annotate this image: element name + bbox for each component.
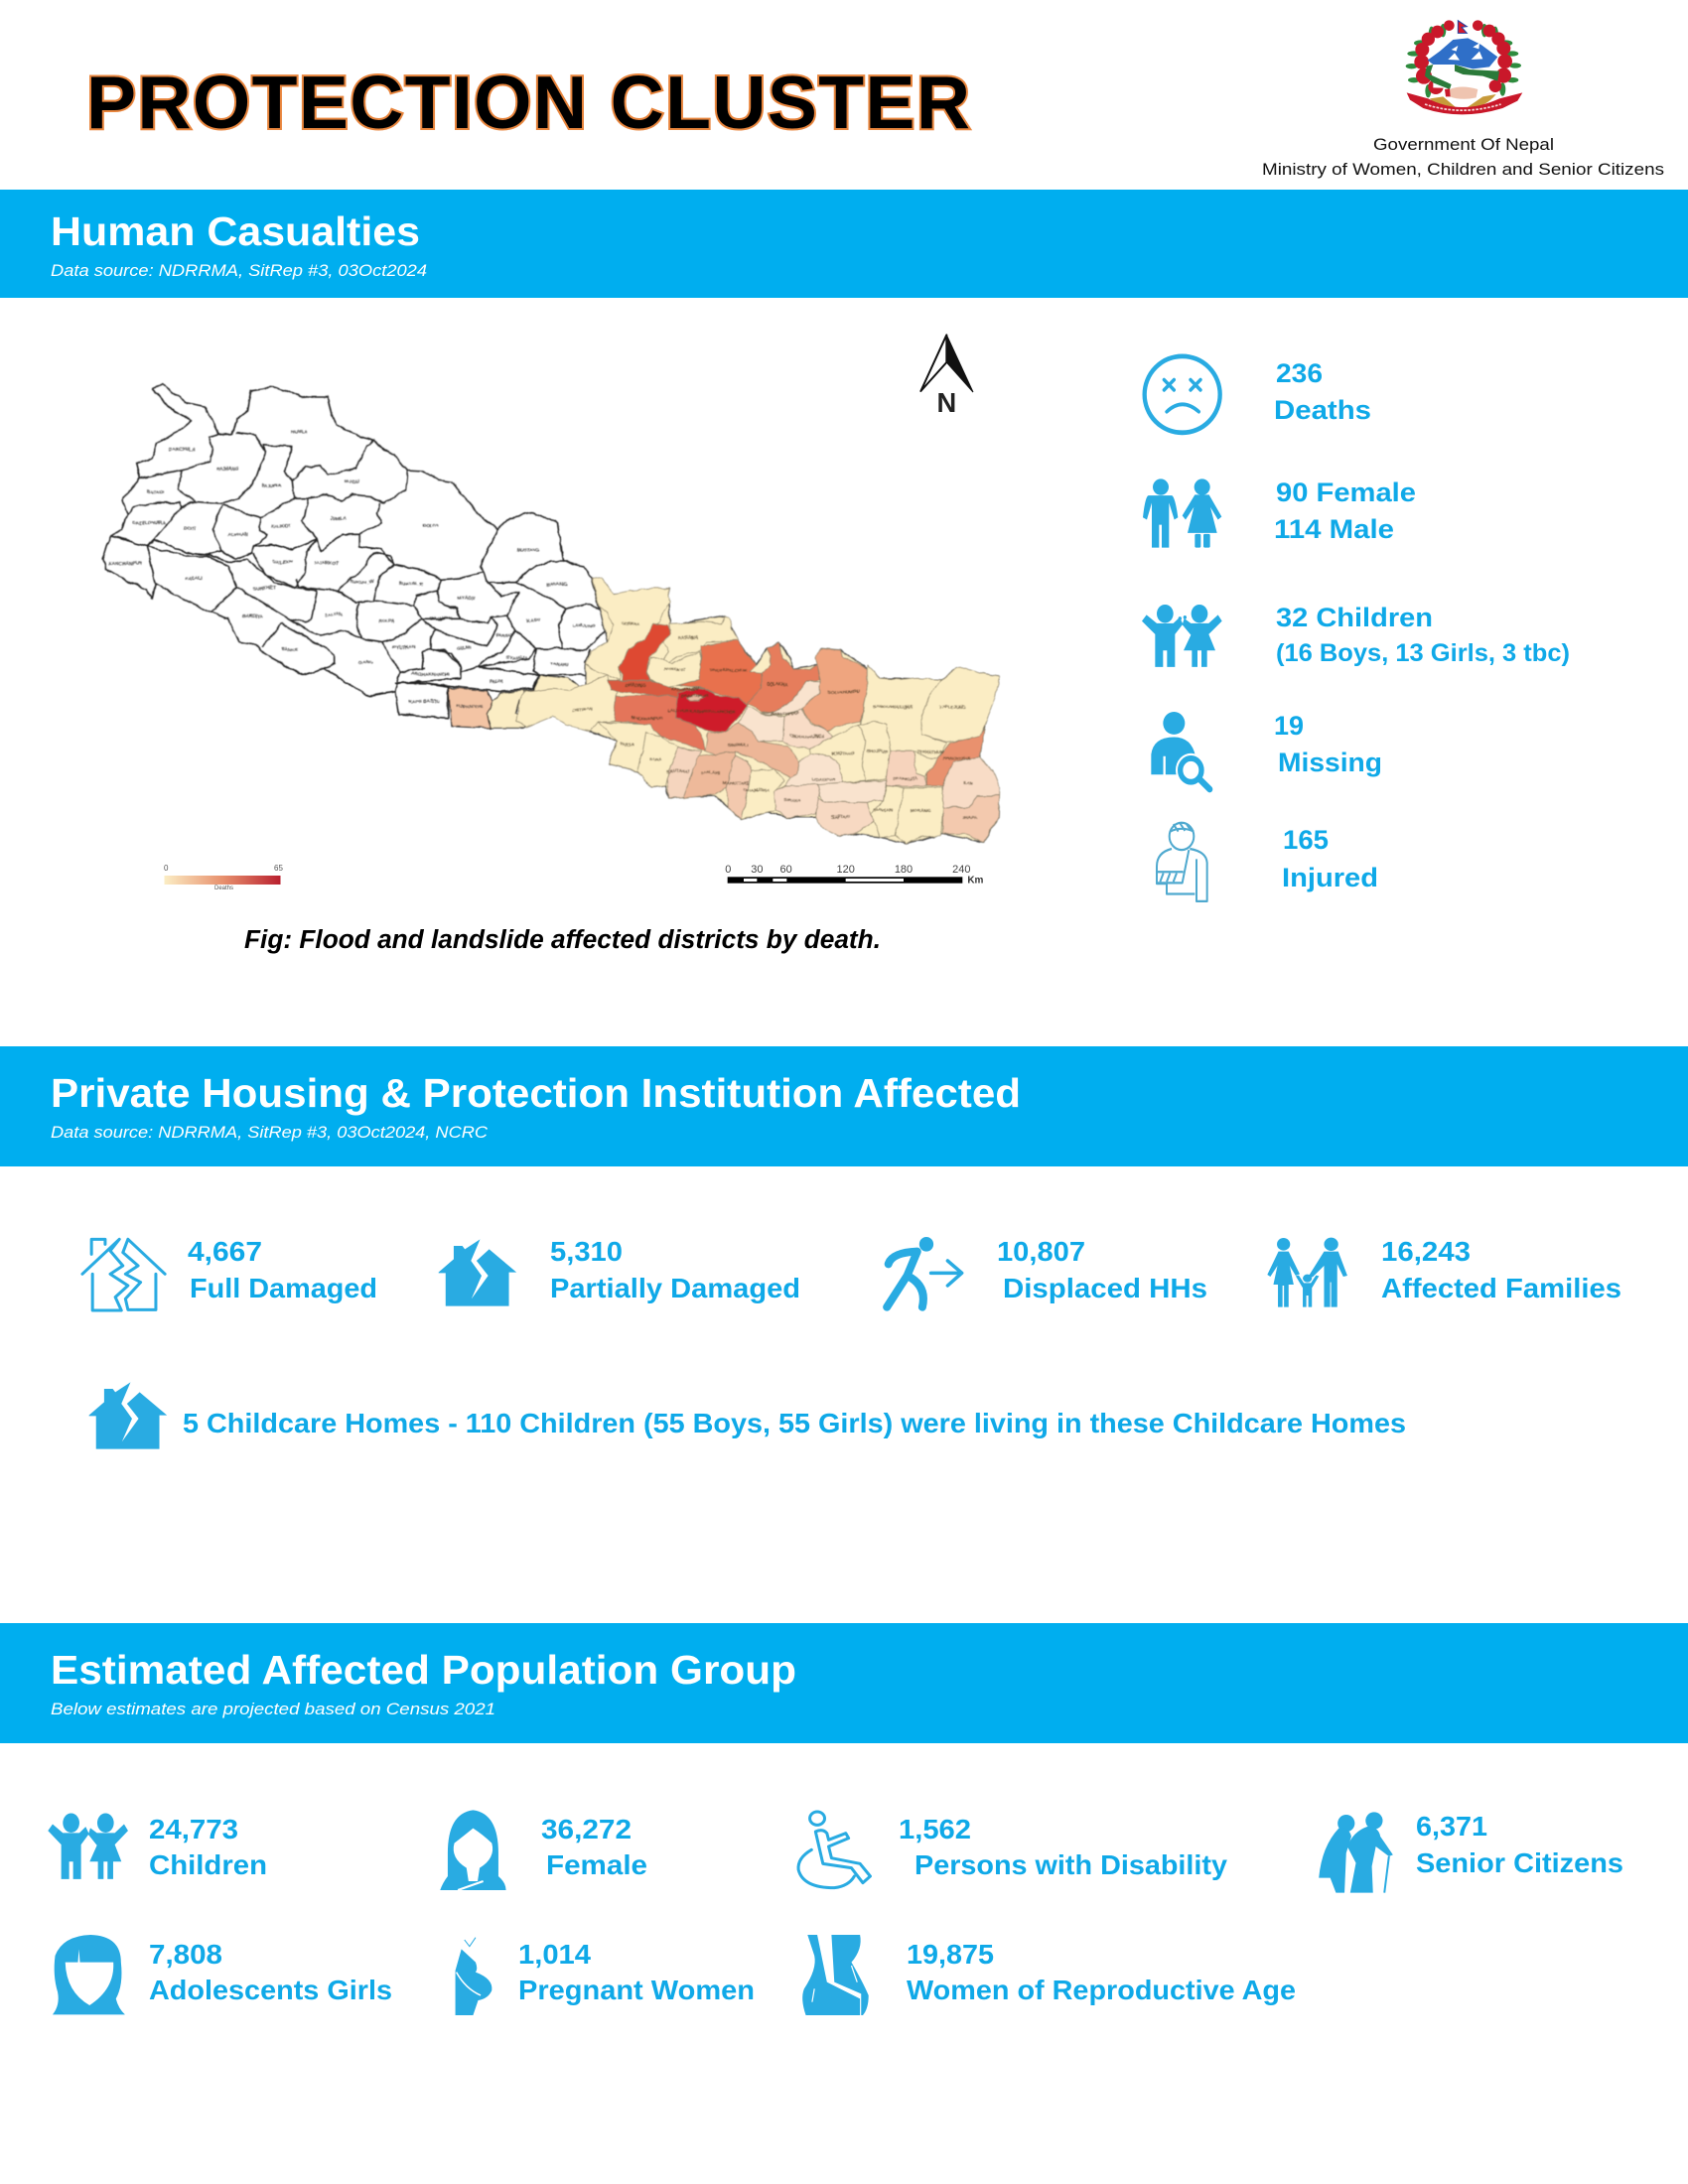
stat: children: 24,773 <box>149 1814 238 1844</box>
legend: deaths colour ramp <box>164 864 283 891</box>
stat: children: Children <box>149 1849 267 1880</box>
map: eastern districts shaded by deaths: BARA <box>649 756 662 761</box>
scale bar: 30 <box>751 864 763 876</box>
map: eastern districts shaded by deaths: SOLUKHUMBU <box>828 690 859 695</box>
map: western districts (unaffected): KAPILBASTU <box>409 699 439 704</box>
map: western districts (unaffected): PYUTHAN <box>393 644 415 649</box>
stat: deaths: Deaths <box>1274 395 1371 425</box>
stat: pregnant women: Pregnant Women <box>518 1975 755 2005</box>
stat: pregnant women <box>518 1939 755 2005</box>
map: western districts (unaffected): RUPANDEHI <box>456 704 483 709</box>
map: eastern districts shaded by deaths: RAMECHHAP <box>771 712 798 717</box>
map: eastern districts shaded by deaths: KHOTANG <box>833 751 855 755</box>
panel: human casualties header <box>0 190 1688 298</box>
map: western districts (unaffected): BAJURA <box>261 483 281 488</box>
stat: female and male: 90 Female <box>1276 478 1416 507</box>
icon: partially damaged house <box>439 1239 516 1306</box>
map: western districts (unaffected): MYAGDI <box>458 596 476 601</box>
scale bar: 180 <box>895 864 913 876</box>
map: western districts (unaffected) <box>102 384 613 728</box>
map: eastern districts shaded by deaths: SUNSARI <box>874 807 894 812</box>
stat: displaced households: 10,807 <box>997 1236 1085 1267</box>
stat: full damaged <box>188 1236 377 1303</box>
map: western districts (unaffected): DADELDHURA <box>132 520 166 525</box>
stat: injured: Injured <box>1282 863 1378 892</box>
map: eastern districts shaded by deaths: DHANKUTA <box>894 776 918 781</box>
map: western districts (unaffected): KALIKOT <box>271 523 291 528</box>
icon: family <box>1267 1238 1347 1307</box>
stat: adolescent girls: 7,808 <box>149 1939 222 1970</box>
stat: female: 36,272 <box>541 1814 632 1844</box>
map: western districts (unaffected): MANANG <box>546 582 567 587</box>
map: eastern districts shaded by deaths: CHITWAN <box>572 707 592 712</box>
map caption: Fig: Flood and landslide affected districts by death. <box>244 926 881 954</box>
map: western districts (unaffected): DOLPA <box>423 522 439 527</box>
map: western districts (unaffected): JUMLA <box>331 516 347 521</box>
stat: deaths <box>1274 358 1371 425</box>
map: eastern districts shaded by deaths: BHAKTAPUR <box>681 694 709 699</box>
map: eastern districts shaded by deaths: SARLAHI <box>700 770 720 775</box>
map: districts <box>102 384 1000 844</box>
icon: fully damaged house <box>82 1239 165 1310</box>
text: ministry name: Ministry of Women, Children and Senior Citizens <box>1262 160 1664 179</box>
scale bar: Km <box>967 875 984 886</box>
map: eastern districts shaded by deaths: UDAYAPUR <box>812 777 837 782</box>
stat: women of reproductive age <box>907 1939 1296 2005</box>
map: eastern districts shaded by deaths: LALITPUR KABHREPALANCHOK <box>667 709 737 714</box>
text: childcare homes: 5 Childcare Homes - 110 Children (55 Boys, 55 Girls) were living in these Childcare Homes <box>183 1408 1406 1438</box>
map: eastern districts shaded by deaths: RAUTAHAT <box>667 768 690 773</box>
stat: women of reproductive age: Women of Reproductive Age <box>907 1975 1296 2005</box>
map: eastern districts shaded by deaths: TAPLEJUNG <box>939 704 966 709</box>
map: western districts (unaffected): RUKUM_E <box>399 582 422 587</box>
map: western districts (unaffected): SYANGJA <box>506 654 529 659</box>
map: western districts (unaffected): PARBAT <box>495 632 514 637</box>
map: eastern districts shaded by deaths: MAHOTTARI <box>723 781 749 786</box>
map: eastern districts shaded by deaths: KATHMANDU <box>671 687 699 692</box>
map: western districts (unaffected): TANAHU <box>550 662 570 667</box>
stat: full damaged: Full Damaged <box>190 1273 377 1303</box>
map: eastern districts shaded by deaths: SAPTARI <box>831 814 850 819</box>
map: western districts (unaffected): KANCHANPUR <box>109 561 143 566</box>
stat: senior citizens: 6,371 <box>1416 1811 1487 1842</box>
icon: north arrow: N <box>936 387 956 418</box>
map: eastern districts shaded by deaths: DHANUSHA <box>745 787 770 792</box>
legend: deaths colour ramp: 0 <box>164 864 169 873</box>
map: western districts (unaffected): ROLPA <box>378 618 395 623</box>
map: western districts (unaffected): BAITADI <box>146 489 164 494</box>
stat: partially damaged: 5,310 <box>550 1236 623 1267</box>
map: eastern districts shaded by deaths: RASUWA <box>678 635 698 640</box>
icon: missing person with magnifier <box>1151 712 1209 789</box>
icon: children <box>48 1814 128 1879</box>
map: western districts (unaffected): DARCHULA <box>169 447 196 452</box>
scale bar <box>725 864 984 886</box>
map: eastern districts shaded by deaths: SANKHUWASABHA <box>873 704 914 709</box>
map: western districts (unaffected): DOTI <box>184 525 195 530</box>
map: eastern districts shaded by deaths <box>516 578 1000 844</box>
map: western districts (unaffected): SALYAN <box>325 613 344 617</box>
map: western districts (unaffected): BANKE <box>282 647 298 652</box>
stat: missing: 19 <box>1274 711 1304 741</box>
map: western districts (unaffected): ARGHAKHANCHI <box>411 672 450 677</box>
stat: children: 32 Children <box>1276 603 1433 632</box>
map: western districts (unaffected): DAILEKH <box>272 559 293 564</box>
text: ministry name: Government Of Nepal <box>1373 135 1554 154</box>
map: eastern districts shaded by deaths: ILAM <box>963 781 974 786</box>
scale bar: 60 <box>780 864 792 876</box>
stat: affected families <box>1381 1236 1621 1303</box>
icon: sad face <box>1145 356 1220 433</box>
map: western districts (unaffected): PALPA <box>489 679 504 684</box>
icon: wheelchair user <box>798 1812 870 1888</box>
panel: private housing header: Data source: NDRRMA, SitRep #3, 03Oct2024, NCRC <box>51 1124 488 1142</box>
map: eastern districts shaded by deaths: BHOJPUR <box>867 749 889 753</box>
map: eastern districts shaded by deaths: MORANG <box>911 807 930 812</box>
stat: missing <box>1274 711 1382 777</box>
map: eastern districts shaded by deaths: TERHATHUM <box>916 750 944 754</box>
stat: injured <box>1282 825 1378 892</box>
map: flood and landslide affected districts by death <box>102 335 1000 891</box>
panel: private housing header: Private Housing & Protection Institution Affected <box>51 1070 1021 1116</box>
stat: female and male: 114 Male <box>1274 514 1394 544</box>
panel: human casualties header: Human Casualties <box>51 208 420 254</box>
stat: women of reproductive age: 19,875 <box>907 1939 994 1970</box>
map: eastern districts shaded by deaths: PARSA <box>620 742 635 747</box>
map: western districts (unaffected): KAILALI <box>185 575 203 580</box>
icon: north arrow <box>920 335 973 418</box>
map: western districts (unaffected): LAMJUNG <box>572 622 596 627</box>
stat: partially damaged: Partially Damaged <box>550 1273 800 1303</box>
stat: adolescent girls <box>149 1939 392 2005</box>
panel: private housing header <box>0 1046 1688 1166</box>
scale bar: 240 <box>952 864 970 876</box>
map: western districts (unaffected): KASKI <box>526 617 540 622</box>
icon: pregnant woman <box>456 1938 492 2015</box>
stat: persons with disability: Persons with Disability <box>914 1849 1227 1880</box>
stat: female and male <box>1274 478 1416 544</box>
icon: injured person with sling <box>1157 823 1207 901</box>
map: eastern districts shaded by deaths: OKHALDHUNGA <box>790 735 825 740</box>
stat: affected families: Affected Families <box>1381 1273 1621 1303</box>
stat: partially damaged <box>550 1236 800 1303</box>
panel: housing statistics <box>82 1236 1621 1449</box>
stat: injured: 165 <box>1283 825 1329 855</box>
map: eastern districts shaded by deaths: DHADING <box>626 683 646 688</box>
map: eastern districts shaded by deaths: MAKAWANPUR <box>632 716 664 721</box>
map: western districts (unaffected): MUGU <box>345 478 358 483</box>
map: western districts (unaffected): BAGLUNG <box>430 616 454 621</box>
icon: displaced person with arrow <box>887 1237 962 1307</box>
map: western districts (unaffected): NAWALPARASI_W <box>523 690 565 695</box>
icon: woman <box>440 1810 506 1890</box>
panel: estimated affected population header: Below estimates are projected based on Census 2021 <box>51 1701 495 1718</box>
stat: senior citizens: Senior Citizens <box>1416 1847 1623 1878</box>
map: western districts (unaffected): GULMI <box>457 646 472 651</box>
stat: displaced households: Displaced HHs <box>1003 1273 1207 1303</box>
icon: senior citizens <box>1319 1812 1393 1893</box>
map: western districts (unaffected): DANG <box>359 660 373 665</box>
stat: full damaged: 4,667 <box>188 1236 262 1267</box>
map: western districts (unaffected): RUKUM_W <box>351 579 375 584</box>
map: eastern districts shaded by deaths: NUWAKOT <box>663 667 686 672</box>
stat: children: (16 Boys, 13 Girls, 3 tbc) <box>1276 639 1570 667</box>
panel: estimated affected population header: Estimated Affected Population Group <box>51 1647 796 1693</box>
icon: government of Nepal emblem <box>1406 20 1522 114</box>
map: eastern districts shaded by deaths: JHAPA <box>962 815 978 820</box>
stat: children <box>1276 603 1570 667</box>
map: western districts (unaffected): ACHHAM <box>228 533 249 538</box>
map: eastern districts shaded by deaths: PANCHTHAR <box>943 755 971 760</box>
stat: female: Female <box>546 1849 647 1880</box>
title: PROTECTION CLUSTER <box>86 61 970 144</box>
map: western districts (unaffected): MUSTANG <box>516 548 540 553</box>
stat: children <box>149 1814 267 1880</box>
icon: man and woman <box>1143 478 1221 548</box>
legend: deaths colour ramp: 65 <box>274 864 283 873</box>
scale bar: 120 <box>836 864 855 876</box>
map: western districts (unaffected): BARDIYA <box>242 614 263 618</box>
stat: female <box>541 1814 647 1880</box>
stat: missing: Missing <box>1278 748 1382 777</box>
map: eastern districts shaded by deaths: DOLAKHA <box>767 682 788 687</box>
stat: pregnant women: 1,014 <box>518 1939 591 1970</box>
map: eastern districts shaded by deaths: SINDHULI <box>728 743 749 748</box>
map: eastern districts shaded by deaths: SIRAHA <box>783 797 801 802</box>
stat: persons with disability <box>899 1814 1227 1880</box>
panel: estimated affected population header <box>0 1623 1688 1743</box>
map: eastern districts shaded by deaths: GORKHA <box>622 621 641 626</box>
map: western districts (unaffected): JAJARKOT <box>314 561 339 566</box>
icon: damaged childcare home <box>89 1382 167 1449</box>
panel: casualty statistics <box>1142 356 1570 901</box>
scale bar: 0 <box>725 864 731 876</box>
stat: senior citizens <box>1416 1811 1623 1878</box>
stat: affected families: 16,243 <box>1381 1236 1471 1267</box>
map: western districts (unaffected): BAJHANG <box>216 467 239 472</box>
map: eastern districts shaded by deaths: SINDHUPALCHOK <box>709 668 748 673</box>
icon: woman of reproductive age <box>802 1935 869 2015</box>
map: western districts (unaffected): SURKHET <box>253 586 275 591</box>
stat: adolescent girls: Adolescents Girls <box>149 1975 392 2005</box>
panel: population statistics <box>48 1810 1623 2015</box>
icon: boy and girl <box>1142 605 1222 667</box>
panel: human casualties header: Data source: NDRRMA, SitRep #3, 03Oct2024 <box>51 262 427 280</box>
stat: persons with disability: 1,562 <box>899 1814 971 1844</box>
icon: adolescent girl <box>53 1935 125 2014</box>
map: western districts (unaffected): HUMLA <box>291 430 309 435</box>
text: ministry name <box>1262 135 1664 179</box>
legend: deaths colour ramp: Deaths <box>214 886 233 891</box>
stat: deaths: 236 <box>1276 358 1323 388</box>
stat: displaced households <box>997 1236 1207 1303</box>
